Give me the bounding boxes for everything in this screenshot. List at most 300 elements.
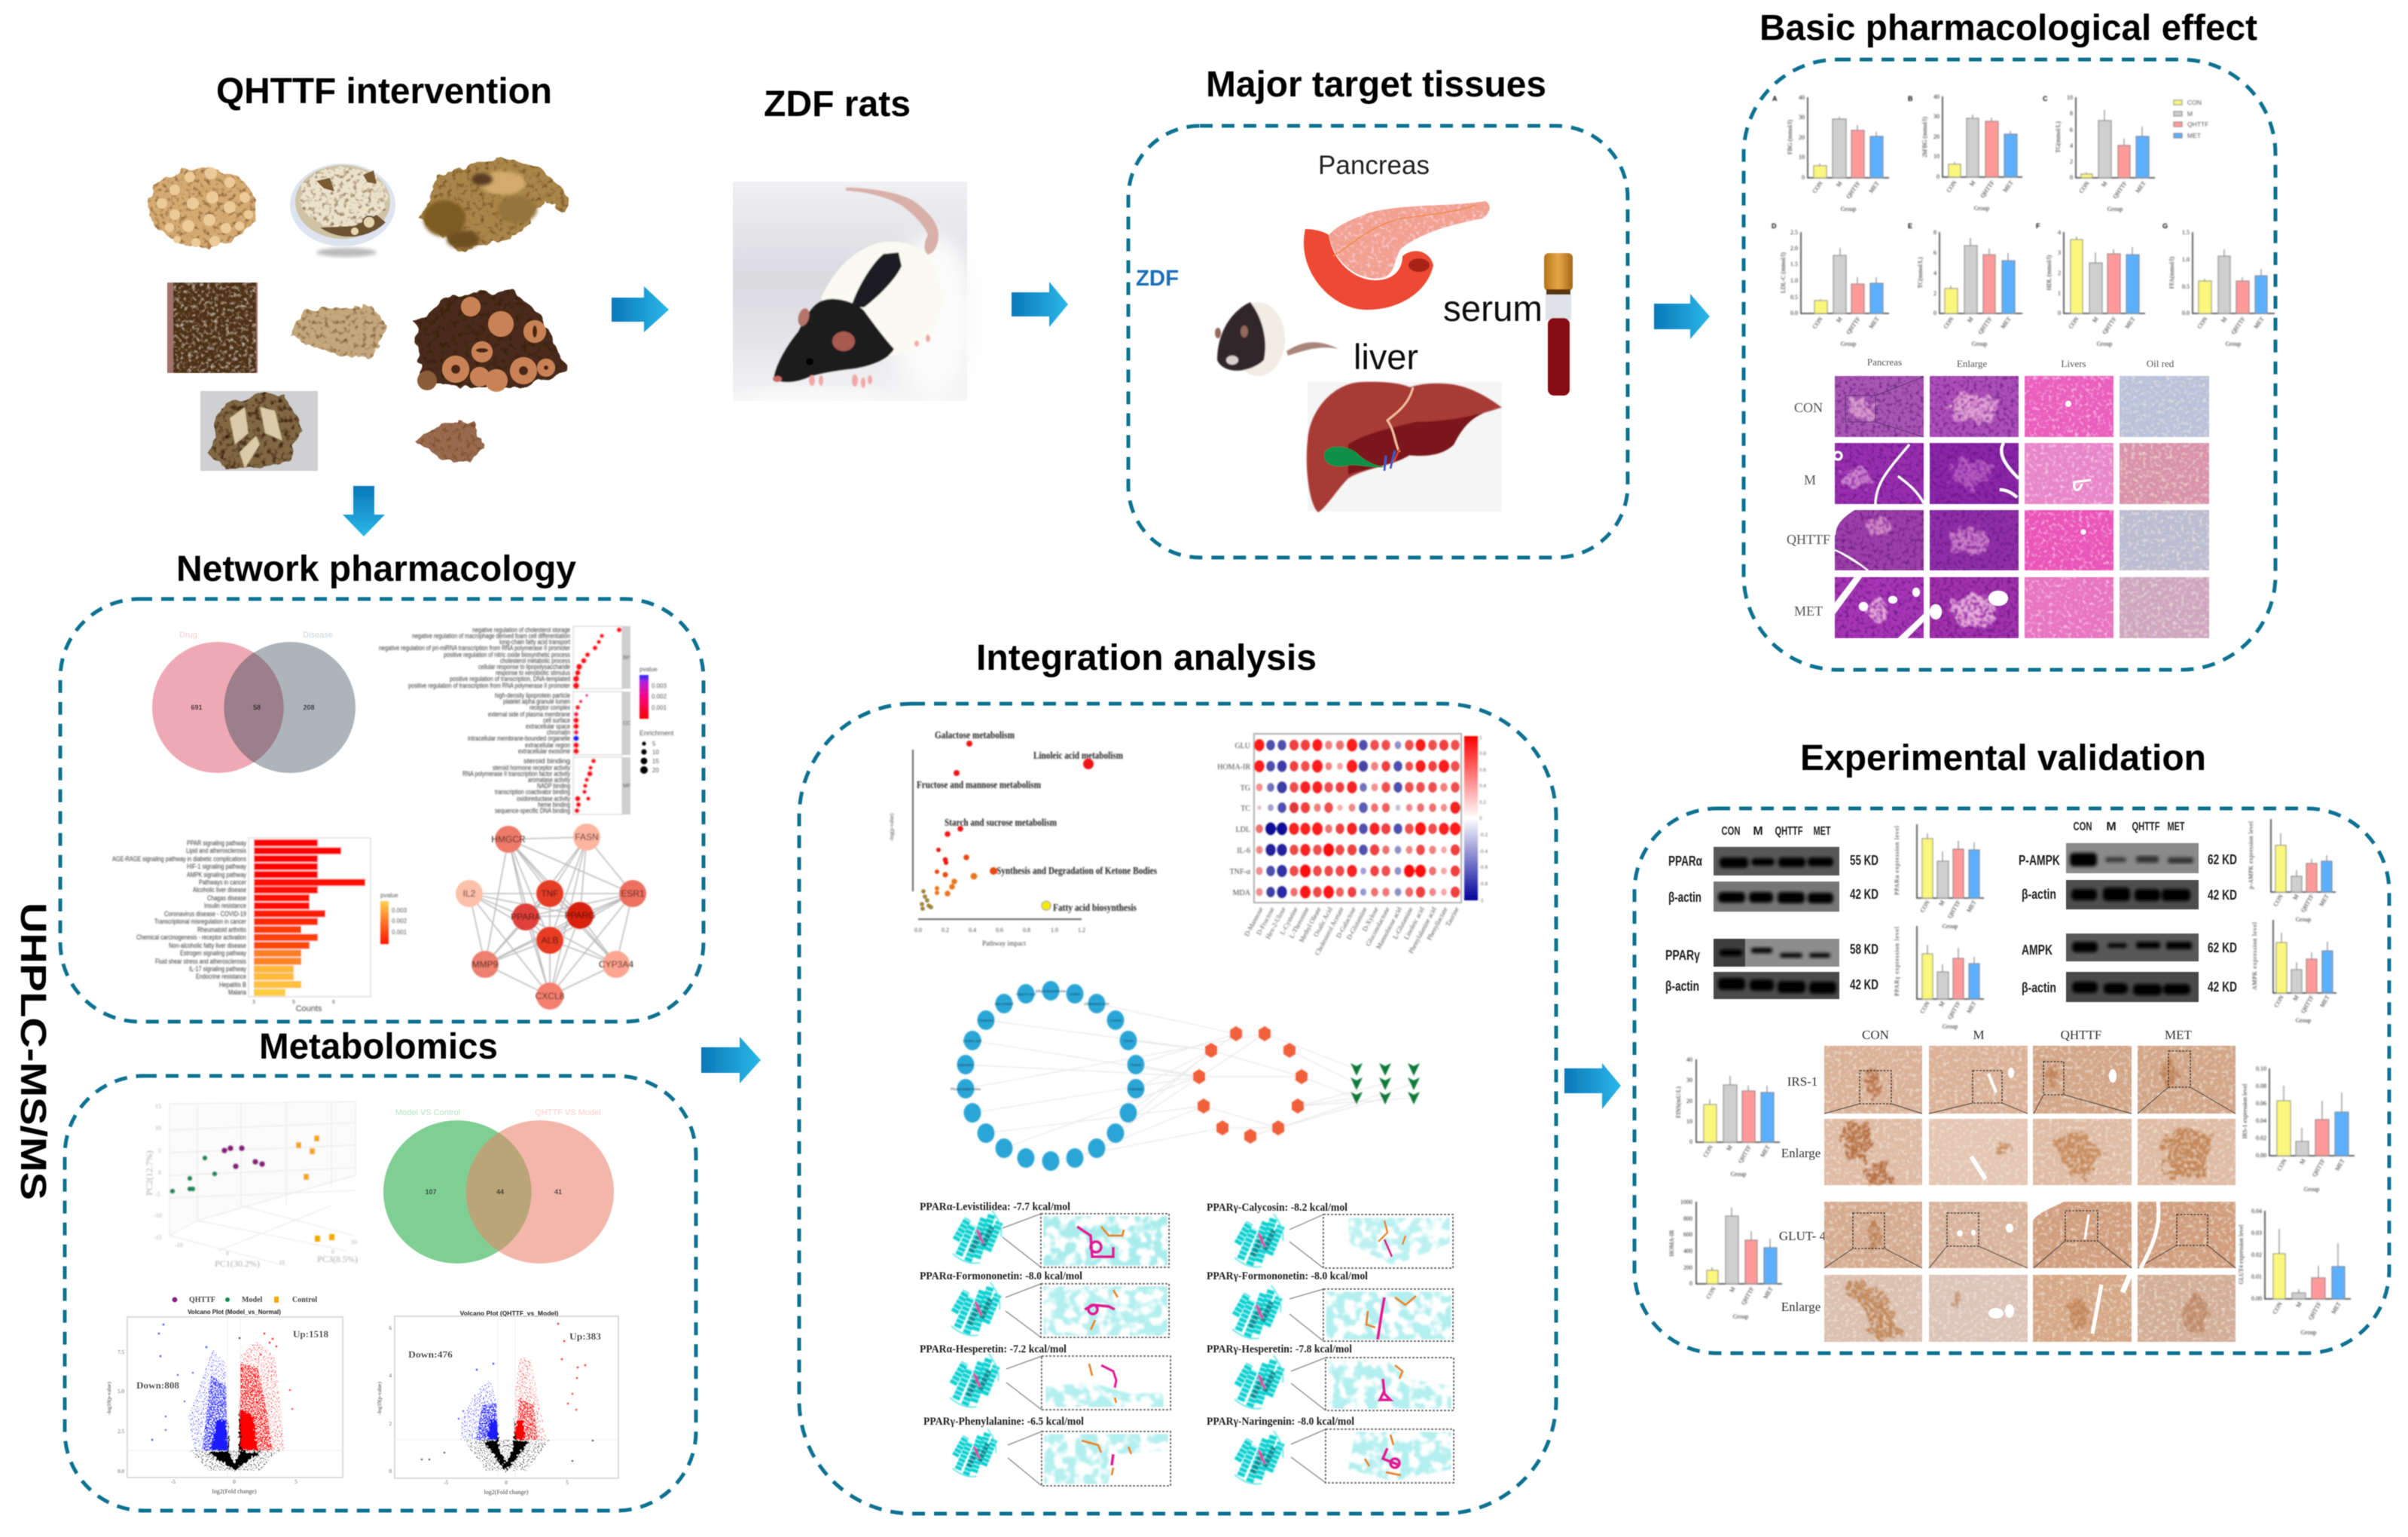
volcano plot: QHTTF vs model: -log10(p-value) xyxy=(377,1381,383,1415)
western blot lane labels, left: MET xyxy=(1814,825,1831,838)
immunohistochemistry row labels: GLUT- 4 xyxy=(1779,1229,1827,1243)
bar chart E: TC: 0 xyxy=(1933,310,1936,316)
volcano plot: QHTTF vs model: Down:476 xyxy=(408,1349,453,1360)
volcano plot: model vs normal: log2(Fold change) xyxy=(212,1488,257,1495)
venn diagram: drug and disease targets: 208 xyxy=(303,704,315,711)
bar chart: FINS: 20 xyxy=(1686,1098,1692,1105)
bar chart: GLUT-4 expression: CON xyxy=(2271,1300,2284,1315)
GO enrichment dot plot xyxy=(379,626,630,814)
western blot lane labels, left xyxy=(1722,825,1831,838)
compound-target-pathway network: Dihydrotestosterone xyxy=(1036,989,1067,993)
pathway impact scatter plot: 0.2 xyxy=(942,927,949,934)
bar chart: FINS: 40 xyxy=(1686,1056,1692,1063)
volcano plot: model vs normal: Up:1518 xyxy=(293,1328,328,1340)
bar chart: FINS: 30 xyxy=(1686,1077,1692,1083)
heatmap metabolite labels: Oxalic Acid xyxy=(1312,906,1334,938)
bar chart C: TG: 0 xyxy=(2070,174,2073,181)
bar chart A: FBG: A xyxy=(1772,95,1778,102)
KEGG pathway bar chart: HIF-1 signaling pathway xyxy=(187,863,246,870)
herb 8: reddish seeds xyxy=(416,422,484,463)
GO enrichment dot plot: negative regulation of macrophage derived foam cell differentiation xyxy=(412,632,570,640)
bar chart D: LDL-C: 2.5 xyxy=(1790,229,1798,236)
bar chart: PPARα expression: QHTTF xyxy=(1946,899,1962,919)
volcano plot: model vs normal: 0 xyxy=(233,1479,236,1485)
heatmap metabolite labels: D-Galactose xyxy=(1335,906,1357,940)
immunohistochemistry: IRS-1 row xyxy=(1824,1046,2236,1114)
venn diagram: metabolite overlap: 107 xyxy=(425,1188,437,1196)
arrow: metabolomics to integration xyxy=(701,1037,761,1083)
western blot: β-actin for P-AMPK: β-actin xyxy=(2022,887,2056,902)
western blot: PPARα: 55 KD xyxy=(1850,853,1878,868)
compound-target-pathway network: Hippuric acid xyxy=(1016,992,1036,996)
western blot: β-actin for PPARα: 42 KD xyxy=(1850,887,1878,902)
GO enrichment dot plot: steroid hormone receptor activity xyxy=(493,764,570,772)
PCA 3D scatter plot: PC2(12.7%) xyxy=(144,1150,154,1196)
immunohistochemistry row labels: IRS-1 xyxy=(1787,1074,1817,1089)
GO enrichment dot plot: external side of plasma membrane xyxy=(488,710,570,718)
western blot: P-AMPK xyxy=(2019,843,2237,873)
bar chart: FINS: MET xyxy=(1759,1144,1772,1159)
KEGG pathway bar chart: AMPK signaling pathway xyxy=(187,871,246,879)
bar chart G: FFA: Group xyxy=(2226,341,2241,347)
bar chart A: FBG: 20 xyxy=(1799,134,1805,141)
heatmap metabolite labels: D-Glutamine xyxy=(1345,906,1369,941)
PCA 3D scatter plot: PC1(30.2%) xyxy=(215,1258,260,1269)
western blot: PPARγ: PPARγ xyxy=(1665,948,1700,963)
bar chart: FINS: FINS(mU/L) xyxy=(1675,1086,1682,1118)
PCA 3D scatter plot: 0 xyxy=(226,1250,229,1257)
legend: GO dot plot p-value and enrichment: 15 xyxy=(652,758,659,765)
pathway impact scatter plot: Starch and sucrose metabolism xyxy=(945,817,1057,829)
label: liver: liver xyxy=(1354,337,1418,377)
PCA 3D scatter plot: PC3(8.5%) xyxy=(317,1254,358,1264)
molecular docking: PPARγ-Calycosin xyxy=(1207,1202,1453,1268)
immunohistochemistry column labels: M xyxy=(1973,1028,1985,1042)
KEGG pathway bar chart: Pathways in cancer xyxy=(199,879,246,886)
KEGG pathway bar chart: Fluid shear stress and atherosclerosis xyxy=(155,958,246,965)
GO enrichment dot plot: response to xenobiotic stimulus xyxy=(496,669,570,677)
title: Basic pharmacological effect: Basic pharmacological effect xyxy=(1759,8,2257,48)
bar chart C: TG: 4 xyxy=(2070,142,2073,149)
bar chart: IRS-1 expression: Group xyxy=(2304,1186,2319,1193)
GO enrichment dot plot: CC xyxy=(623,721,630,726)
histology column labels: Oil red xyxy=(2147,358,2175,369)
bar chart F: HDL: 4 xyxy=(2058,229,2061,236)
legend: GO dot plot p-value and enrichment: 0.002 xyxy=(652,693,667,700)
bar chart: FINS: M xyxy=(1725,1144,1734,1152)
bar chart: P-AMPK expression: CON xyxy=(2272,893,2284,908)
bar chart: IRS-1 expression: QHTTF xyxy=(2311,1157,2327,1178)
bar chart G: FFA: CON xyxy=(2196,316,2209,330)
bar chart: IRS-1 expression: 0.00 xyxy=(2256,1152,2266,1159)
bar chart F: HDL: M xyxy=(2091,316,2100,324)
bar chart: GLUT-4 expression: 0.01 xyxy=(2251,1273,2262,1280)
bar chart: GLUT-4 expression: M xyxy=(2294,1300,2303,1309)
legend: PCA groups: Model xyxy=(242,1296,262,1304)
western blot lane labels, left: CON xyxy=(1722,825,1740,838)
bar chart D: LDL-C: 1.5 xyxy=(1790,261,1798,267)
bar chart G: FFA: 0.5 xyxy=(2182,283,2190,290)
compound-target-pathway network xyxy=(951,981,1420,1171)
heatmap colour bar: 1 xyxy=(1479,735,1482,741)
bar chart: HOMA-IR: M xyxy=(1728,1285,1737,1294)
bar chart D: LDL-C: MET xyxy=(1868,316,1881,330)
pathway impact scatter plot: Fatty acid biosynthesis xyxy=(1053,903,1137,914)
GO enrichment dot plot: positive regulation of nitric oxide biosynthetic process xyxy=(444,651,570,658)
heatmap row GLU xyxy=(1254,738,1460,752)
histology column labels: Pancreas xyxy=(1867,356,1902,368)
bar chart: IRS-1 expression xyxy=(2242,1065,2355,1193)
pathway impact scatter plot xyxy=(889,730,1157,947)
bar chart A: FBG: 0 xyxy=(1802,174,1805,181)
KEGG pathway bar chart: Alcoholic liver disease xyxy=(193,886,246,894)
heatmap metabolite labels: D-Mannose xyxy=(1243,906,1265,937)
immunohistochemistry row labels xyxy=(1779,1074,1827,1314)
pathway impact scatter plot: 1.2 xyxy=(1078,927,1085,934)
venn diagram: metabolite overlap xyxy=(383,1108,614,1264)
legend: GO dot plot p-value and enrichment: 0.003 xyxy=(652,683,667,689)
molecular docking: PPARα-Hesperetin: PPARα-Hesperetin: -7.2 kcal/mol xyxy=(920,1343,1067,1355)
KEGG pathway bar chart: Coronavirus disease - COVID-19 xyxy=(164,910,246,918)
heatmap metabolite labels: Phenyllactate xyxy=(1425,906,1449,942)
western blot: β-actin for PPARγ: 42 KD xyxy=(1850,977,1878,992)
KEGG pathway bar chart: PPAR signaling pathway xyxy=(187,839,246,847)
bar chart E: TC: 4 xyxy=(1933,270,1936,277)
molecular docking: PPARα-Formononetin xyxy=(920,1270,1169,1337)
GO enrichment dot plot: steroid binding xyxy=(523,757,570,765)
bar chart G: FFA: MET xyxy=(2253,316,2266,330)
volcano plot: QHTTF vs model: 4 xyxy=(389,1373,392,1379)
immunohistochemistry: GLUT-4 row xyxy=(1824,1202,2236,1268)
legend: GO dot plot p-value and enrichment: 10 xyxy=(652,749,659,756)
compound-target-pathway network: Phosphatidylcholine xyxy=(951,1087,981,1091)
correlation heatmap: TNF-α xyxy=(1230,868,1251,876)
legend: KEGG p-value: 0.001 xyxy=(392,929,407,936)
bar chart F: HDL: QHTTF xyxy=(2101,316,2118,335)
bar chart: HOMA-IR: 400 xyxy=(1683,1248,1692,1254)
bar chart G: FFA: 0.0 xyxy=(2182,310,2190,316)
immunohistochemistry row labels: Enlarge xyxy=(1781,1300,1820,1314)
protein interaction network: CYP3A4 xyxy=(599,959,633,970)
legend: GO dot plot p-value and enrichment: pvalue xyxy=(639,666,658,673)
bar chart D: LDL-C: CON xyxy=(1811,316,1824,330)
bar chart E: TC: MET xyxy=(2000,316,2013,330)
GO enrichment dot plot: NADP binding xyxy=(537,782,570,790)
bar chart B: 2hFBG: B xyxy=(1908,95,1913,102)
arrow: ZDF rats to target tissues xyxy=(1012,282,1068,327)
bar chart E: TC: QHTTF xyxy=(1976,316,1994,335)
protein interaction network xyxy=(456,824,646,1010)
heatmap metabolite labels: Taurine xyxy=(1444,906,1460,927)
immunohistochemistry row labels: Enlarge xyxy=(1781,1146,1820,1160)
GO enrichment dot plot: cellular response to lipopolysaccharide xyxy=(478,663,570,671)
GO enrichment dot plot: aromatase activity xyxy=(528,776,570,784)
western blot: β-actin for AMPK: 42 KD xyxy=(2208,979,2237,995)
arrow: herbs to network pharmacology xyxy=(343,486,385,536)
immunohistochemistry column labels: CON xyxy=(1862,1028,1889,1042)
bar chart: IRS-1 expression: 0.04 xyxy=(2256,1117,2266,1124)
volcano plot: QHTTF vs model: Up:383 xyxy=(569,1331,602,1342)
venn diagram: drug and disease targets: 58 xyxy=(253,704,261,711)
western blot: AMPK xyxy=(2022,934,2237,961)
bar chart B: 2hFBG: 2hFBG (mmol/l) xyxy=(1921,117,1928,157)
bar chart F: HDL: 3 xyxy=(2058,249,2061,256)
PCA 3D scatter plot: 10 xyxy=(351,1239,357,1245)
bar chart: GLUT-4 expression: Group xyxy=(2301,1329,2316,1336)
correlation heatmap: TG xyxy=(1241,784,1250,793)
bar chart: HOMA-IR: Group xyxy=(1733,1313,1748,1320)
bar chart: GLUT-4 expression: 0.02 xyxy=(2251,1251,2262,1258)
legend: treatment groups: MET xyxy=(2187,132,2201,139)
volcano plot: model vs normal: 5 xyxy=(295,1479,298,1485)
GO enrichment dot plot: extracellular exosome xyxy=(518,747,570,755)
GO enrichment dot plot: cholesterol metabolic process xyxy=(500,657,570,665)
bar chart: P-AMPK expression: Group xyxy=(2296,916,2311,923)
bar chart C: TG: 10 xyxy=(2067,94,2073,101)
bar chart: IRS-1 expression: 0.06 xyxy=(2256,1100,2266,1107)
bar chart E: TC: E xyxy=(1908,222,1912,230)
title: Experimental validation: Experimental validation xyxy=(1800,738,2206,778)
correlation heatmap: IL-6 xyxy=(1237,847,1250,855)
pathway impact scatter plot: 0.4 xyxy=(969,927,976,934)
bar chart B: 2hFBG: 20 xyxy=(1933,133,1940,140)
bar chart: AMPK expression: CON xyxy=(2272,994,2285,1009)
pathway impact scatter plot: 1.0 xyxy=(1051,927,1058,934)
protein interaction network: CXCL8 xyxy=(536,991,565,1001)
legend: GO dot plot p-value and enrichment: 20 xyxy=(652,767,659,774)
western blot lane labels, right: QHTTF xyxy=(2132,820,2160,833)
molecular docking: PPARγ-Phenylalanine: PPARγ-Phenylalanine: -6.5 kcal/mol xyxy=(923,1416,1084,1428)
KEGG pathway bar chart: Rheumatoid arthritis xyxy=(197,926,246,934)
bar chart: HOMA-IR: CON xyxy=(1705,1285,1717,1300)
micrographs: oil red column xyxy=(2120,376,2209,638)
heatmap metabolite labels: D-Fructose xyxy=(1255,906,1276,937)
bar chart D: LDL-C xyxy=(1772,222,1889,347)
bar chart: GLUT-4 expression: MET xyxy=(2330,1300,2342,1315)
herb 2: sliced root in bowl xyxy=(290,163,395,257)
venn diagram: drug and disease targets xyxy=(152,631,356,773)
PCA 3D scatter plot: 15 xyxy=(155,1103,161,1110)
bar chart D: LDL-C: LDL-C (mmol/l) xyxy=(1780,252,1787,293)
histology column labels xyxy=(1867,356,2175,369)
heatmap metabolite labels: Phenylalanine acid xyxy=(1407,906,1438,955)
protein interaction network: PPARA xyxy=(511,912,541,922)
bar chart E: TC xyxy=(1908,222,2022,347)
protein interaction network: ALB xyxy=(542,935,558,946)
heatmap metabolite labels: L-Threonine xyxy=(1288,906,1311,940)
bar chart: PPARα expression: MET xyxy=(1965,899,1978,914)
bar chart: IRS-1 expression: 0.08 xyxy=(2256,1083,2266,1089)
bar chart G: FFA: QHTTF xyxy=(2229,316,2247,335)
KEGG pathway bar chart: Non-alcoholic fatty liver disease xyxy=(169,942,246,949)
bar chart: PPARα expression: Group xyxy=(1943,923,1958,930)
heatmap metabolite labels: Mannobiose acid xyxy=(1375,906,1403,950)
western blot lane labels, right xyxy=(2073,820,2185,833)
protein interaction network: TNF xyxy=(541,888,559,899)
volcano plot: model vs normal: -5 xyxy=(171,1479,175,1485)
molecular docking: PPARγ-Hesperetin xyxy=(1207,1343,1454,1410)
bar chart A: FBG: Group xyxy=(1841,206,1856,212)
heatmap row IL-6 xyxy=(1256,843,1460,857)
PCA 3D scatter plot: 5 xyxy=(158,1147,161,1154)
legend: GO dot plot p-value and enrichment: 0.001 xyxy=(652,704,667,711)
micrographs: pancreas column xyxy=(1834,376,1924,638)
bar chart: PPARγ expression: M xyxy=(1937,1001,1946,1008)
volcano plot: QHTTF vs model xyxy=(377,1309,618,1496)
venn diagram: metabolite overlap: Model VS Control xyxy=(395,1108,460,1117)
volcano plot: QHTTF vs model: 2 xyxy=(389,1421,392,1427)
PCA 3D scatter plot: -5 xyxy=(155,1191,160,1198)
bar chart: HOMA-IR: 0 xyxy=(1689,1280,1692,1287)
legend: KEGG p-value: 0.002 xyxy=(392,918,407,924)
KEGG pathway bar chart: Lipid and atherosclerosis xyxy=(186,847,246,854)
volcano plot: model vs normal xyxy=(106,1309,343,1495)
western blot: β-actin for PPARα xyxy=(1668,882,1878,912)
bar chart: PPARγ expression xyxy=(1894,926,1984,1030)
heatmap metabolite labels xyxy=(1243,906,1460,956)
bar chart G: FFA: 1.0 xyxy=(2182,256,2190,263)
bar chart: GLUT-4 expression: QHTTF xyxy=(2307,1300,2323,1321)
bar chart: HOMA-IR: 200 xyxy=(1683,1264,1692,1271)
bar chart: IRS-1 expression: 0.02 xyxy=(2256,1135,2266,1141)
herb 7: dried slices photo xyxy=(200,391,318,471)
heatmap colour bar: -0.2 xyxy=(1479,833,1488,838)
correlation heatmap: MDA xyxy=(1233,889,1251,897)
label: ZDF: ZDF xyxy=(1136,266,1179,291)
immunohistochemistry: IRS-1 enlarged row xyxy=(1824,1119,2236,1185)
molecular docking: PPARγ-Phenylalanine xyxy=(923,1416,1170,1486)
bar chart C: TG: MET xyxy=(2135,180,2147,194)
bar chart E: TC: Group xyxy=(1972,341,1987,347)
bar chart: PPARγ expression: QHTTF xyxy=(1946,1000,1962,1020)
bar chart F: HDL xyxy=(2036,222,2145,347)
western blot lane labels, left: M xyxy=(1753,825,1763,838)
bar chart: P-AMPK expression xyxy=(2248,819,2336,923)
bar chart F: HDL: CON xyxy=(2068,316,2080,330)
bar chart: FINS: QHTTF xyxy=(1737,1144,1753,1164)
bar chart A: FBG: FBG (mmol/l) xyxy=(1787,120,1793,154)
compound-target-pathway network: Cortisol xyxy=(1109,1019,1122,1022)
molecular docking: PPARα-Levistilidea xyxy=(920,1201,1169,1267)
bar chart: GLUT-4 expression: 0.03 xyxy=(2251,1230,2262,1236)
PCA 3D scatter plot: 10 xyxy=(279,1259,285,1266)
bar chart B: 2hFBG: M xyxy=(1968,179,1977,188)
bar chart: HOMA-IR: MET xyxy=(1762,1285,1775,1300)
western blot lane labels, right: M xyxy=(2106,820,2117,833)
KEGG pathway bar chart: IL-17 signaling pathway xyxy=(189,965,246,973)
volcano plot: model vs normal: -log10(p-value) xyxy=(106,1381,112,1415)
molecular docking: PPARα-Levistilidea: PPARα-Levistilidea: -7.7 kcal/mol xyxy=(920,1201,1070,1213)
title: Network pharmacology: Network pharmacology xyxy=(176,549,576,589)
bar chart A: FBG: MET xyxy=(1868,180,1881,194)
histology micrograph grid xyxy=(1834,376,2209,638)
heatmap metabolite labels: D-Xylose xyxy=(1361,906,1380,933)
bar chart D: LDL-C: Group xyxy=(1841,341,1856,347)
bar chart C: TG: QHTTF xyxy=(2111,180,2129,200)
immunohistochemistry: GLUT-4 enlarged row xyxy=(1824,1275,2236,1342)
KEGG pathway bar chart: Malaria xyxy=(228,989,246,996)
bar chart D: LDL-C: D xyxy=(1772,222,1777,230)
venn diagram: drug and disease targets: 691 xyxy=(191,704,203,711)
legend: PCA groups xyxy=(172,1296,317,1304)
panel: major target tissues xyxy=(1128,126,1628,558)
protein interaction network: MMP9 xyxy=(472,959,499,970)
bar chart: AMPK expression: AMPK expression level xyxy=(2251,921,2258,990)
KEGG pathway bar chart: Estrogen signaling pathway xyxy=(180,949,246,957)
GO enrichment dot plot: intracellular membrane-bounded organelle xyxy=(468,735,570,742)
heatmap colour bar: -0.8 xyxy=(1479,882,1488,887)
bar chart: HOMA-IR: HOMA-IR xyxy=(1668,1230,1675,1257)
pathway impact scatter plot: Linoleic acid metabolism xyxy=(1033,750,1123,762)
volcano plot: QHTTF vs model: log2(Fold change) xyxy=(484,1489,529,1496)
bar chart A: FBG: 40 xyxy=(1799,94,1805,101)
GO enrichment dot plot: extracellular space xyxy=(526,723,570,730)
bar chart: P-AMPK expression: p-AMPK expression level xyxy=(2248,820,2254,889)
histology row labels: QHTTF xyxy=(1787,532,1830,547)
molecular docking: PPARγ-Formononetin: PPARγ-Formononetin: -8.0 kcal/mol xyxy=(1207,1270,1368,1282)
western blot: β-actin for PPARγ xyxy=(1665,972,1878,999)
bar chart: GLUT-4 expression: 0.04 xyxy=(2251,1208,2262,1215)
bar chart: HOMA-IR: QHTTF xyxy=(1740,1285,1756,1306)
bar chart A: FBG: CON xyxy=(1811,180,1824,194)
bar chart: PPARγ expression: PPARγ expression level xyxy=(1894,926,1900,996)
photo: ZDF rat xyxy=(733,182,979,401)
bar chart D: LDL-C: 0.0 xyxy=(1790,310,1798,316)
KEGG pathway bar chart: Chagas disease xyxy=(207,894,246,902)
GO enrichment dot plot: RNA polymerase II transcription factor activity xyxy=(462,770,570,778)
volcano plot: QHTTF vs model: 5 xyxy=(566,1480,569,1486)
protein interaction network: FASN xyxy=(575,832,599,842)
GO enrichment dot plot: MF xyxy=(623,784,630,789)
compound-target-pathway network: Cholesteryl ester xyxy=(1084,1002,1109,1006)
GO enrichment dot plot: positive regulation of transcription, DNA-templated xyxy=(450,675,570,683)
western blot lane labels, right: CON xyxy=(2073,820,2092,833)
heatmap row LDL xyxy=(1256,822,1460,836)
PCA 3D scatter plot: -10 xyxy=(175,1242,183,1248)
heatmap metabolite labels: Cholesterol Acetate xyxy=(1314,906,1345,956)
pathway impact scatter plot: Galactose metabolism xyxy=(935,730,1015,741)
KEGG pathway bar chart: Endocrine resistance xyxy=(196,973,246,980)
heatmap metabolite labels: L-Glutamine xyxy=(1391,906,1415,940)
GO enrichment dot plot: cell surface xyxy=(543,717,570,724)
western blot: β-actin for P-AMPK: 42 KD xyxy=(2208,888,2237,903)
heatmap metabolite labels: Linoleic acid xyxy=(1402,906,1426,941)
herb 6: dark round slices xyxy=(416,291,565,392)
icon: liver xyxy=(1307,382,1502,512)
legend: GO dot plot p-value and enrichment: 5 xyxy=(652,741,656,747)
PCA 3D scatter plot: -10 xyxy=(154,1212,162,1219)
volcano plot: QHTTF vs model: Volcano Plot (QHTTF_vs_Model) xyxy=(460,1309,558,1317)
bar chart: PPARα expression: CON xyxy=(1918,899,1931,914)
western blot: PPARγ: 58 KD xyxy=(1850,942,1878,957)
title: Integration analysis: Integration analysis xyxy=(976,638,1317,678)
bar chart: IRS-1 expression: 0.10 xyxy=(2256,1065,2266,1072)
GO enrichment dot plot: high-density lipoprotein particle xyxy=(495,692,570,699)
western blot: β-actin for AMPK: β-actin xyxy=(2022,980,2056,995)
compound-target-pathway network: Linoleic acid xyxy=(963,1039,982,1043)
western blot: P-AMPK: 62 KD xyxy=(2208,852,2237,867)
bar chart C: TG: 8 xyxy=(2070,110,2073,117)
GO enrichment dot plot: extracellular region xyxy=(525,741,570,749)
PCA 3D scatter plot: 10 xyxy=(155,1125,161,1132)
bar chart C: TG: Group xyxy=(2107,206,2123,212)
bar chart D: LDL-C: 0.5 xyxy=(1790,294,1798,301)
GO enrichment dot plot: platelet alpha granule lumen xyxy=(503,698,570,705)
histology column labels: Enlarge xyxy=(1957,358,1987,369)
venn diagram: drug and disease targets: Disease xyxy=(303,631,333,640)
bar chart B: 2hFBG: 0 xyxy=(1936,173,1940,180)
bar chart F: HDL: 1 xyxy=(2058,290,2061,297)
